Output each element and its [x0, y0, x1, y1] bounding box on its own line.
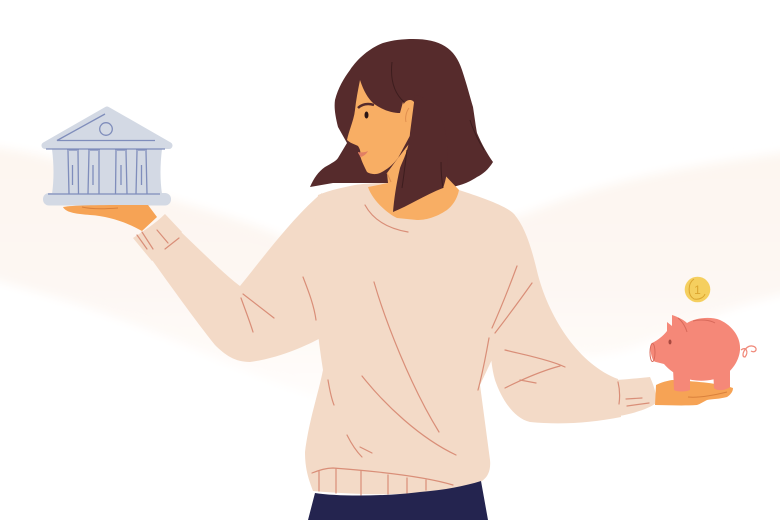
hair back — [310, 39, 493, 188]
neck and collar skin — [368, 140, 459, 220]
bank body — [52, 149, 162, 194]
pig body — [651, 315, 740, 381]
icon: piggy bank — [650, 315, 756, 392]
pig legs — [673, 368, 730, 392]
bank roof — [45, 110, 169, 146]
bank line work — [46, 114, 165, 194]
eyebrow — [358, 104, 374, 108]
left cuff — [133, 214, 182, 261]
ear — [402, 100, 415, 135]
pig eye — [668, 340, 672, 344]
right cuff — [616, 377, 656, 416]
pig details — [650, 318, 756, 362]
hair front strand — [393, 95, 448, 212]
eye — [364, 112, 368, 118]
lips — [358, 151, 368, 157]
bank base — [43, 193, 171, 206]
hair strand lines — [387, 62, 484, 188]
sweater — [133, 183, 656, 495]
right sleeve — [490, 214, 621, 423]
icon: gold coin — [685, 277, 710, 302]
torso — [305, 183, 525, 494]
left sleeve — [152, 193, 335, 362]
face — [347, 80, 413, 174]
icon: bank building — [43, 110, 171, 206]
right hand — [655, 380, 733, 405]
head details — [347, 62, 484, 212]
coin value: 1 — [694, 283, 701, 297]
trousers — [308, 481, 488, 520]
background: soft peach hills — [0, 146, 780, 398]
left hand holding the bank — [63, 205, 157, 231]
sweater fold lines — [137, 205, 649, 495]
